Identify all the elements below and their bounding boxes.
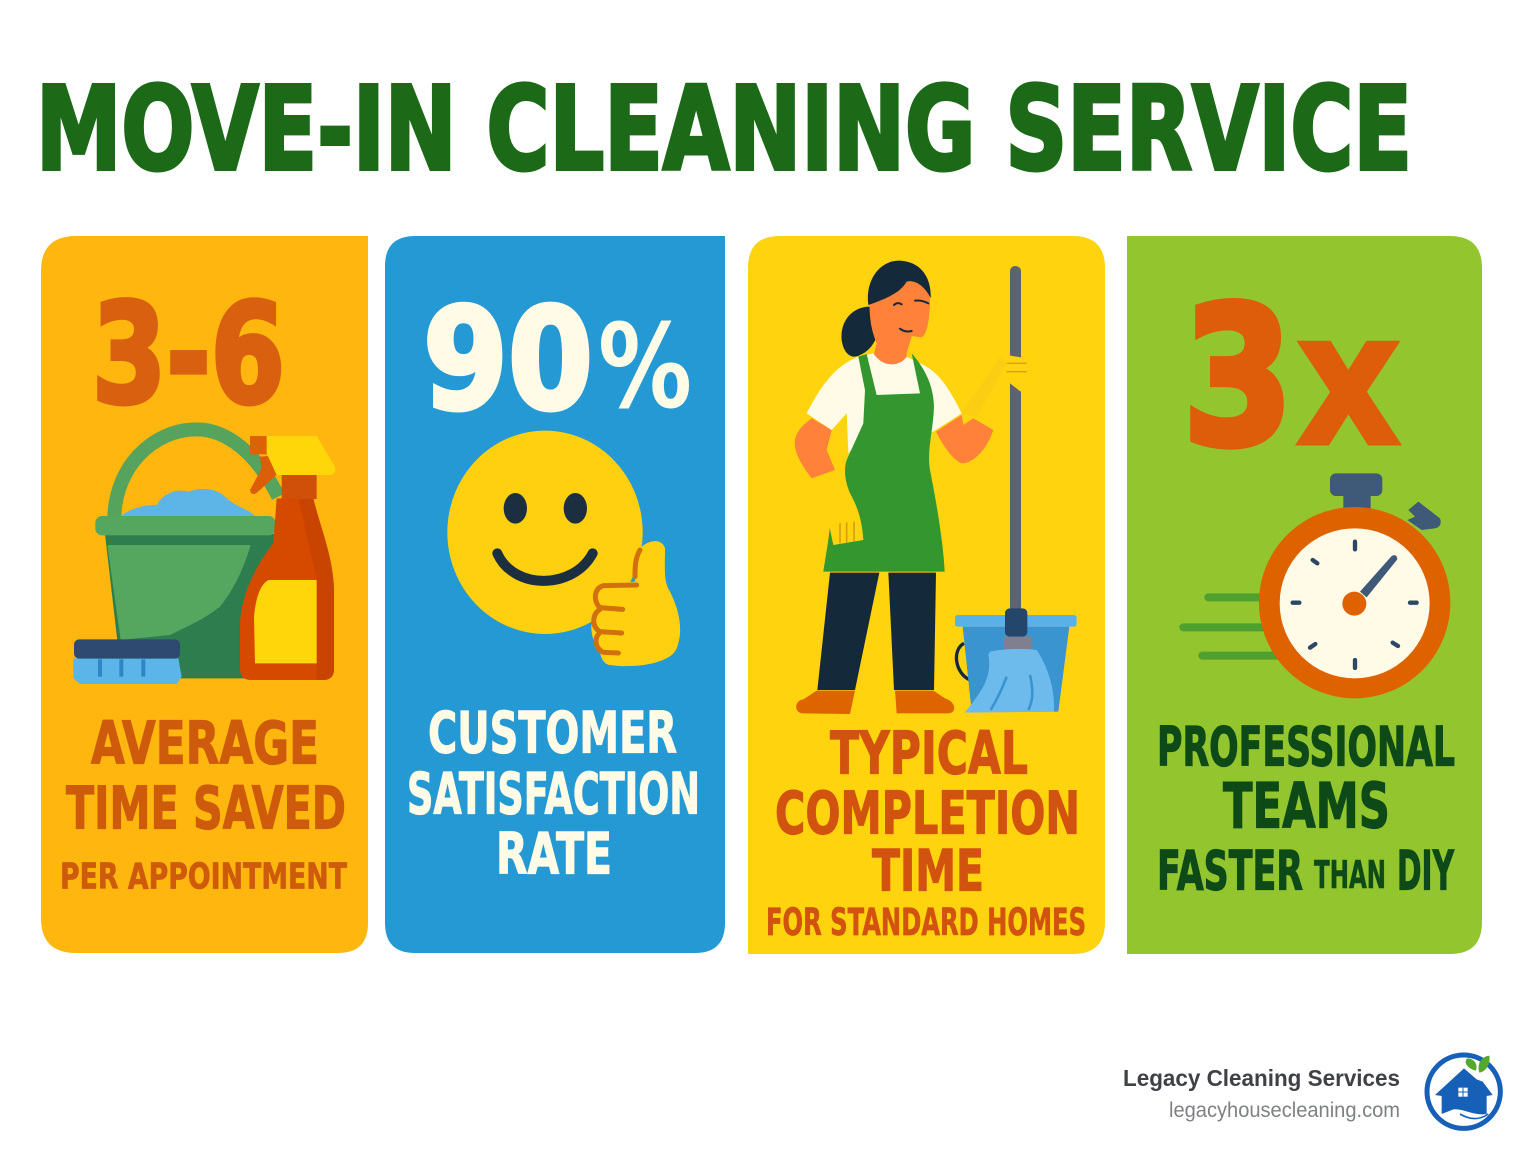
label: than: THAN — [1314, 853, 1386, 897]
leaves — [1466, 1056, 1490, 1073]
facial features — [894, 301, 928, 331]
logo ring — [1427, 1055, 1500, 1128]
smiley face — [447, 431, 643, 634]
left arm — [795, 418, 835, 478]
stat: 90: 90 — [423, 279, 593, 442]
panel: customer satisfaction — [385, 236, 725, 953]
mop head — [1005, 608, 1027, 637]
label: completion: COMPLETION — [775, 778, 1080, 848]
panel: professional teams — [1127, 236, 1482, 954]
card background — [41, 236, 368, 953]
bucket body — [105, 534, 275, 678]
icon: company logo — [1427, 1055, 1500, 1128]
hand on pole — [1007, 355, 1028, 392]
card background — [1127, 236, 1482, 954]
apron — [823, 353, 945, 572]
card background — [748, 236, 1105, 954]
label: satisfaction: SATISFACTION — [407, 762, 700, 828]
hand — [1360, 555, 1397, 597]
icon: stopwatch with speed lines — [1183, 473, 1450, 698]
shoes — [796, 691, 954, 714]
house — [1435, 1068, 1493, 1114]
panel: time saved — [41, 236, 368, 953]
website: legacyhousecleaning.com — [1169, 1099, 1400, 1122]
mop pole — [1010, 266, 1021, 613]
stat: 3-6: 3-6 — [92, 274, 285, 435]
label: DIY: DIY — [1397, 840, 1454, 902]
tick marks — [1293, 542, 1417, 668]
bottle label — [254, 580, 317, 663]
stat: x: x — [1295, 271, 1402, 488]
foam — [121, 489, 255, 516]
label: per appointment: PER APPOINTMENT — [60, 856, 347, 898]
crown and side button — [1343, 492, 1371, 510]
stat: 3: 3 — [1183, 267, 1293, 488]
card background — [385, 236, 725, 953]
icon: smiley with thumbs up — [447, 431, 680, 666]
pants — [817, 573, 936, 690]
label: typical: TYPICAL — [830, 718, 1028, 788]
spray bottle — [240, 498, 334, 680]
label: for standard homes: FOR STANDARD HOMES — [766, 901, 1086, 944]
label: time saved: TIME SAVED — [66, 774, 346, 842]
speed lines — [1183, 597, 1283, 656]
glove: right hand — [962, 357, 1007, 417]
label: customer: CUSTOMER — [428, 700, 677, 766]
glove: left hand — [817, 483, 863, 545]
right arm — [936, 415, 993, 463]
label: teams: TEAMS — [1223, 770, 1390, 842]
label: time: TIME — [872, 838, 984, 904]
stat: percent sign: % — [598, 300, 692, 435]
illustration: cleaner with mop and bucket — [795, 261, 1077, 714]
mop bucket — [963, 627, 1069, 712]
thumbs up — [591, 541, 680, 666]
footer brand — [1123, 1055, 1500, 1128]
ponytail — [841, 307, 879, 357]
bucket handle — [114, 429, 278, 518]
panel: completion time — [748, 236, 1105, 954]
scrub brush — [73, 658, 182, 684]
brand name: Legacy Cleaning Services — [1123, 1065, 1400, 1091]
watch body — [1259, 507, 1450, 698]
label: faster: FASTER — [1157, 840, 1303, 902]
bucket rim — [95, 516, 275, 535]
mop bucket handle — [956, 643, 970, 680]
icon: bucket, spray bottle and brush — [73, 429, 335, 684]
face and neck — [869, 281, 930, 367]
label: average: AVERAGE — [91, 708, 319, 778]
shirt — [807, 353, 962, 453]
wave — [1460, 1114, 1488, 1118]
window — [1458, 1088, 1468, 1097]
hair — [868, 261, 931, 305]
label: rate: RATE — [496, 822, 612, 888]
